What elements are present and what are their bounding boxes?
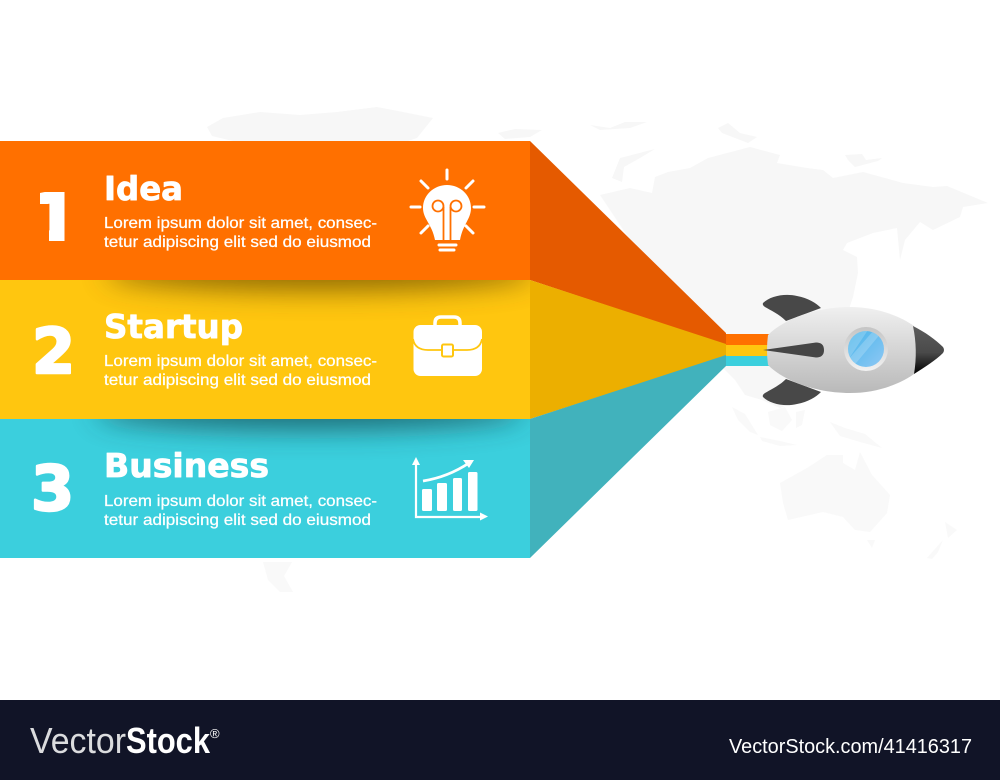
body text <box>104 215 377 251</box>
body text <box>104 493 377 529</box>
number 3: 3 <box>31 452 74 525</box>
logo: VectorStock <box>30 720 220 761</box>
body text: tetur adipiscing elit sed do eiusmod <box>104 372 371 389</box>
panel: step 3 business <box>0 419 530 558</box>
body text: tetur adipiscing elit sed do eiusmod <box>104 234 371 251</box>
rocket exhaust stripes <box>726 334 770 366</box>
icon: rocket <box>763 295 944 405</box>
logo: VectorStock: Vector <box>30 720 126 761</box>
rocket fins <box>763 295 821 405</box>
icon: light bulb <box>411 170 484 250</box>
icon: growth chart <box>412 457 488 520</box>
rocket body <box>767 307 916 393</box>
panel: step 1 idea <box>0 141 530 280</box>
logo: VectorStock: ® <box>210 726 220 741</box>
shadow under step 1 <box>98 280 530 310</box>
body text: Lorem ipsum dolor sit amet, consec- <box>104 353 377 370</box>
heading: Idea: Idea <box>104 169 183 208</box>
footer band <box>0 700 1000 780</box>
heading: Business: Business <box>104 446 269 485</box>
panel: step 2 startup <box>0 280 530 419</box>
body text: tetur adipiscing elit sed do eiusmod <box>104 512 371 529</box>
logo: VectorStock: Stock <box>126 720 211 761</box>
world map background <box>207 107 988 592</box>
image id: VectorStock.com/41416317 <box>729 735 972 758</box>
body text <box>104 353 377 389</box>
shadow under step 2 <box>90 419 530 448</box>
rocket tail fin <box>763 342 824 358</box>
number 1: 1 <box>32 180 80 257</box>
icon: briefcase <box>413 317 482 376</box>
number 2: 2 <box>32 315 75 388</box>
rocket window <box>842 327 888 371</box>
heading: Startup: Startup <box>104 307 243 346</box>
rocket nose cone <box>913 326 944 374</box>
body text: Lorem ipsum dolor sit amet, consec- <box>104 215 377 232</box>
panel: beam side faces <box>530 141 726 558</box>
body text: Lorem ipsum dolor sit amet, consec- <box>104 493 377 510</box>
